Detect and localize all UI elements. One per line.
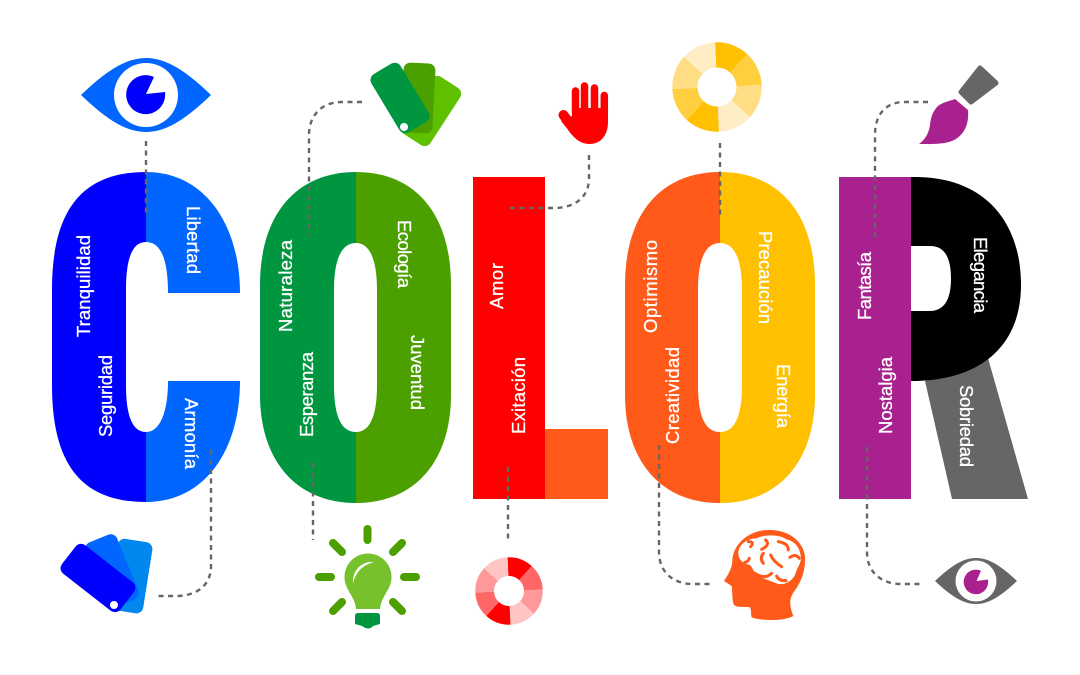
label: Seguridad: Seguridad	[95, 355, 116, 437]
letter C	[52, 172, 240, 502]
label: Creatividad: Creatividad	[662, 347, 683, 444]
icon: red donut	[467, 549, 551, 633]
letter O green	[260, 172, 451, 503]
label: Optimismo: Optimismo	[640, 240, 661, 333]
label: Libertad: Libertad	[183, 206, 204, 274]
letter O orange	[625, 172, 815, 503]
connector: green O top	[309, 102, 362, 236]
label: Fantasía: Fantasía	[854, 251, 875, 320]
label: Exitación: Exitación	[508, 357, 529, 434]
letter R	[839, 177, 1028, 499]
label: Juventud: Juventud	[407, 335, 428, 410]
connector: L top	[508, 155, 589, 208]
icon: blue eye	[81, 58, 211, 132]
connector: C bottom	[158, 450, 211, 596]
connector: L bottom	[507, 467, 509, 540]
label: Nostalgia: Nostalgia	[875, 356, 896, 434]
label: Tranquilidad: Tranquilidad	[73, 235, 94, 337]
connector: orange O bottom	[659, 445, 713, 584]
label: Amor: Amor	[486, 263, 507, 309]
connector: R top	[875, 102, 928, 238]
icon: blue swatches	[58, 532, 153, 615]
icon: grey eye	[935, 558, 1017, 604]
label: Ecología: Ecología	[394, 220, 415, 289]
connector: C top	[145, 141, 147, 214]
label: Armonía: Armonía	[181, 398, 202, 470]
icon: light bulb	[319, 529, 416, 628]
label: Elegancia: Elegancia	[970, 237, 991, 314]
label: Energía: Energía	[773, 364, 794, 429]
icon: green swatches	[368, 60, 464, 149]
label: Esperanza: Esperanza	[296, 351, 317, 437]
connector: green O bottom	[312, 463, 314, 540]
connector: R bottom	[867, 447, 921, 584]
letter L	[473, 177, 608, 499]
connector: orange O top	[719, 143, 721, 217]
label: Precaución: Precaución	[755, 231, 776, 324]
label: Naturaleza: Naturaleza	[275, 239, 296, 332]
icon: paintbrush	[919, 68, 996, 144]
label: Sobriedad: Sobriedad	[956, 385, 977, 467]
icon: red hand	[561, 86, 608, 144]
icon: head with brain	[724, 530, 805, 620]
icon: yellow donut	[661, 31, 773, 143]
